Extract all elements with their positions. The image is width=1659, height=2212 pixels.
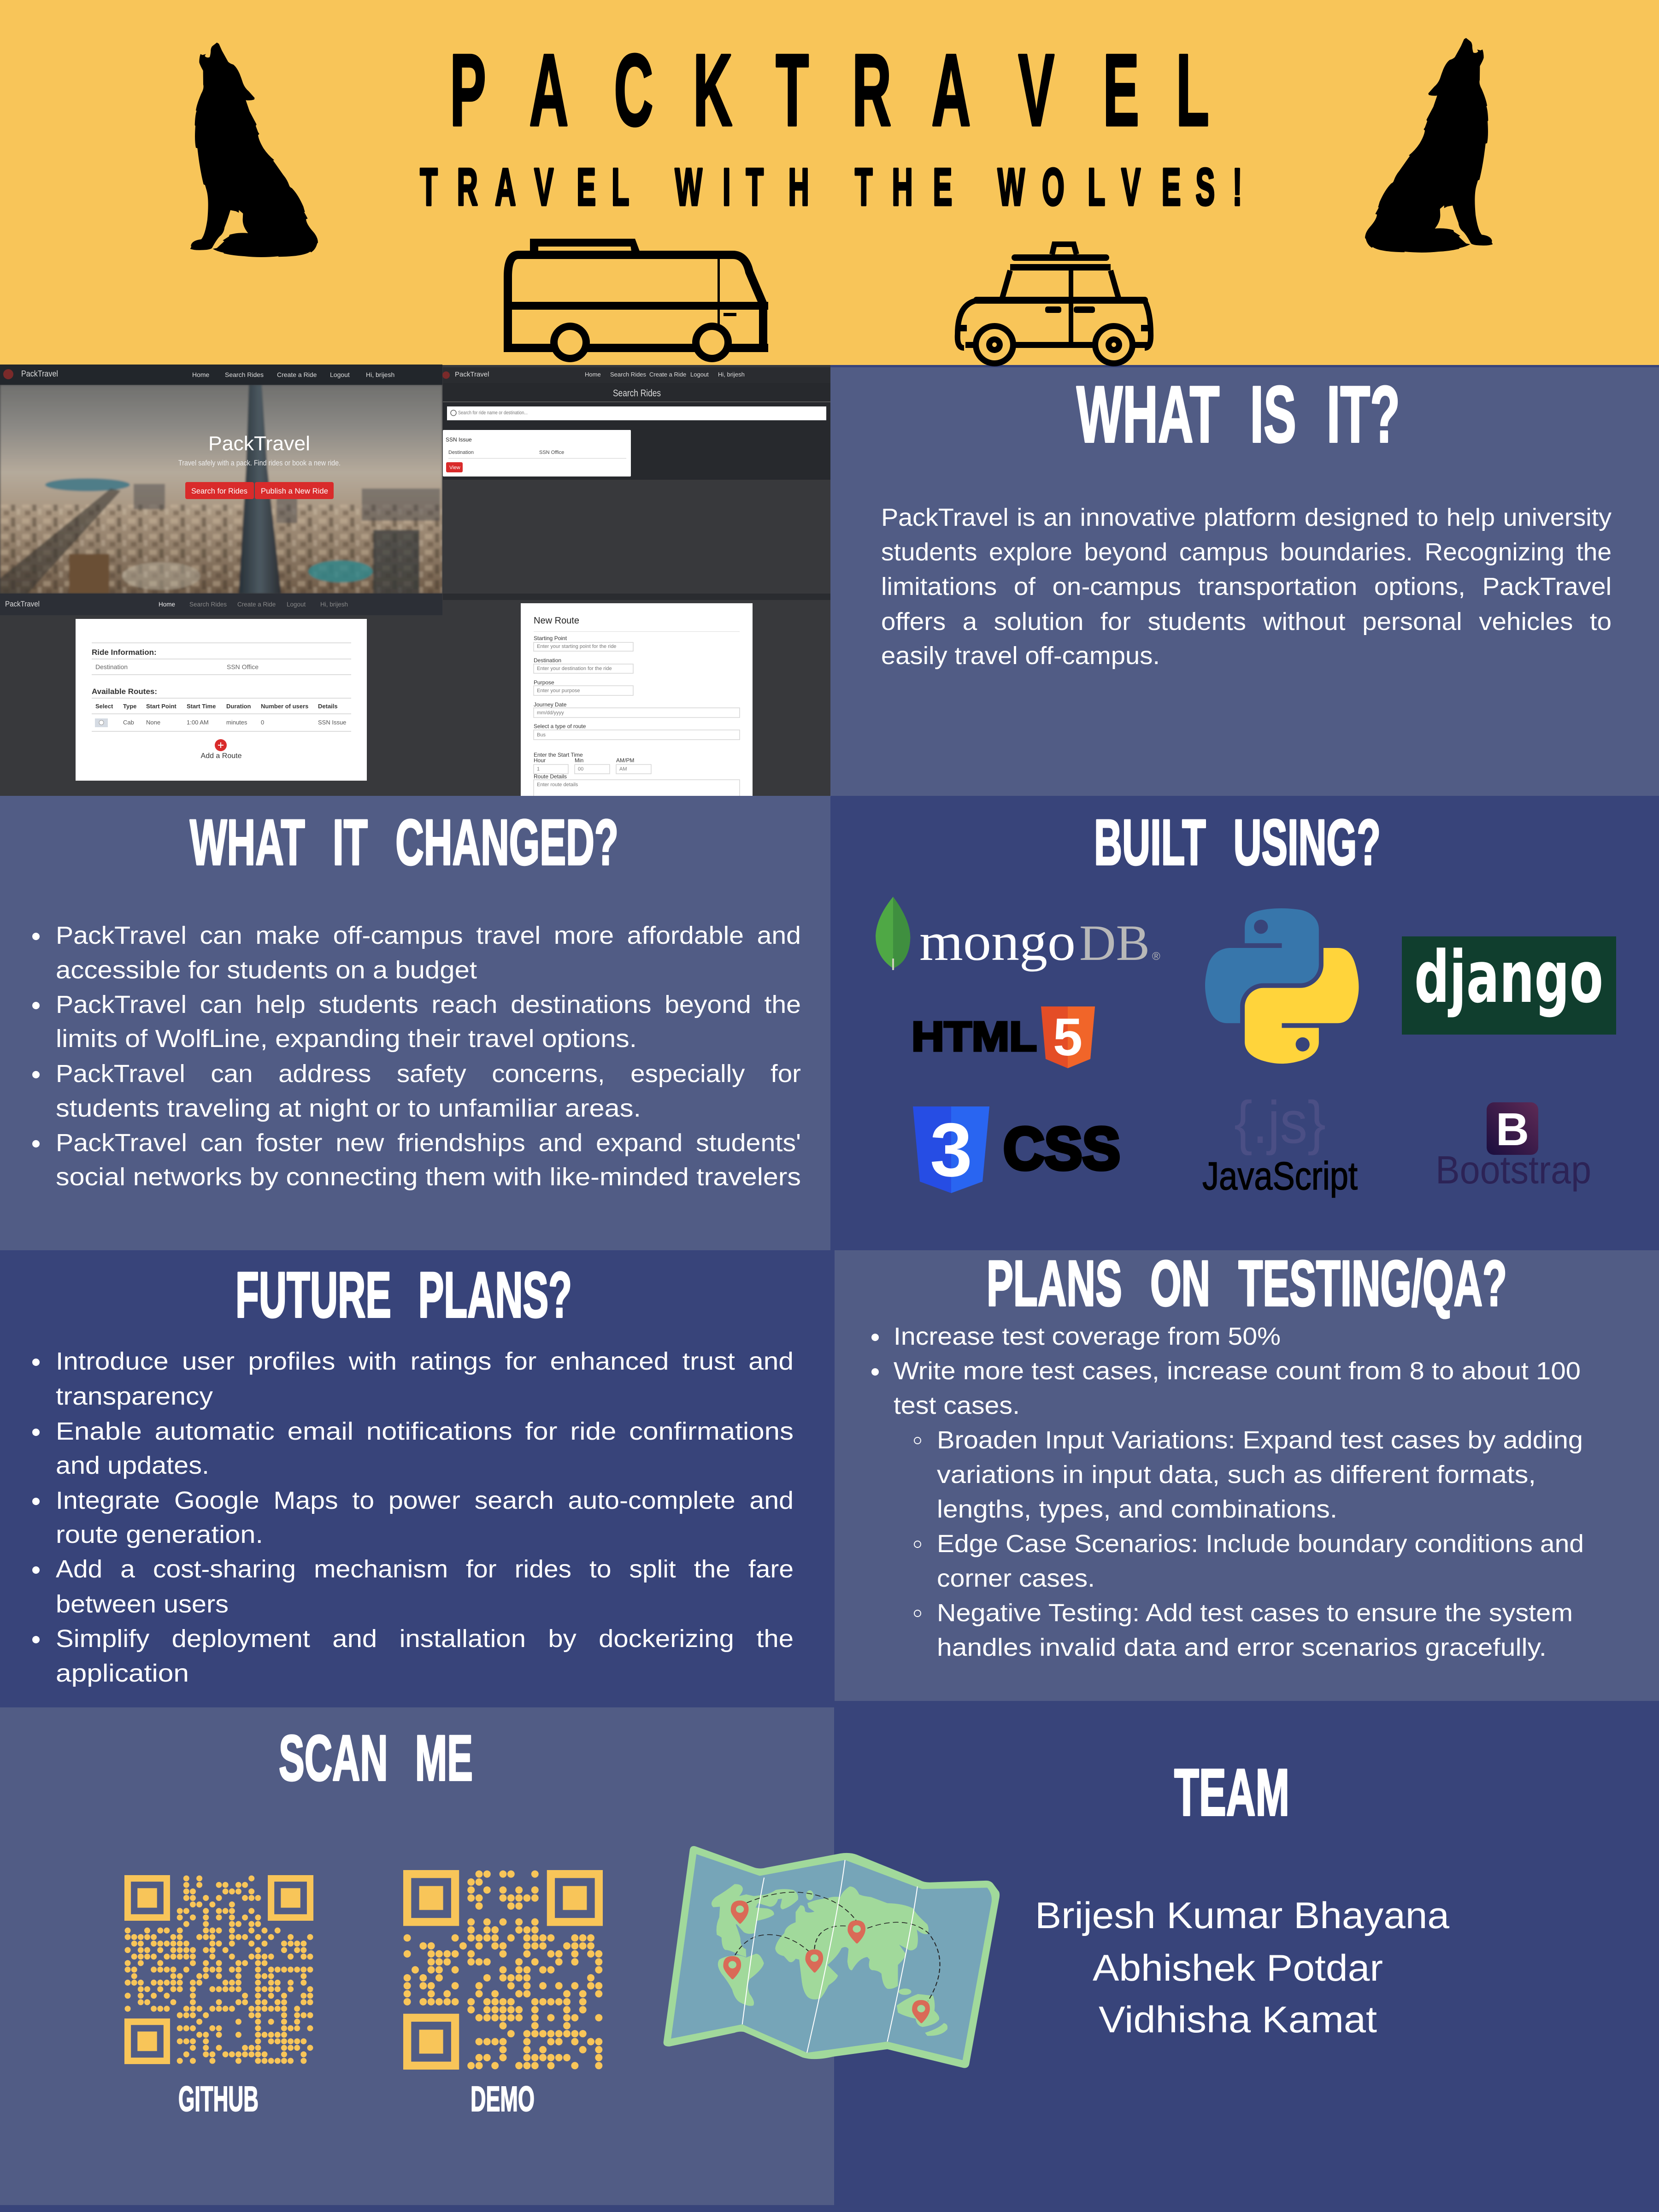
list: changes: PackTravel can help students reach destinations beyond the (56, 991, 801, 1018)
list: testing plans: handles invalid data and error scenarios gracefully. (937, 1634, 1547, 1661)
screenshot: new route form: Hour (534, 757, 546, 764)
logo: javascript (1202, 1088, 1358, 1198)
logo: css3 (913, 1106, 1120, 1193)
screenshot: home page: PackTravel (208, 432, 310, 455)
screenshot: new route form: 00 (578, 766, 583, 772)
screenshot: ride details: Hi, brijesh (320, 601, 348, 608)
screenshot: search rides: SSN Office (539, 450, 564, 455)
screenshot: new route form: Route Details (534, 773, 567, 780)
icon: howling wolf left (190, 42, 318, 257)
panel: plans on testing (835, 1247, 1659, 1701)
list: testing plans: Broaden Input Variations: Expand test cases by adding (937, 1426, 1583, 1454)
screenshot: ride details: 1:00 AM (187, 719, 209, 726)
screenshot: new route form: Bus (537, 732, 546, 738)
logo: css3: CSS (1003, 1115, 1120, 1182)
heading: what it changed: WHAT IT CHANGED? (190, 806, 618, 878)
screenshot: ride details: Select (95, 703, 113, 710)
panel: app screenshots (0, 365, 830, 798)
screenshot: search rides: View (449, 465, 460, 471)
team names: Brijesh Kumar Bhayana (1035, 1895, 1450, 1936)
screenshot: search rides: Search for ride name or destination... (458, 410, 528, 416)
screenshot: new route form: Enter the Start Time (534, 752, 583, 758)
list: changes: PackTravel can make off-campus travel more affordable and (56, 922, 801, 949)
logo: django (1402, 935, 1616, 1035)
list: changes: accessible for students on a budget (56, 956, 477, 984)
screenshot: ride details: Create a Ride (237, 601, 276, 608)
icon: taxi cab (958, 244, 1151, 366)
icon: folded world map (664, 1846, 1000, 2068)
screenshot: new route form: Min (575, 757, 583, 764)
screenshot: search rides: Search Rides (613, 388, 661, 399)
logo: bootstrap: Bootstrap (1435, 1148, 1591, 1192)
text block: description: easily travel off-campus. (881, 642, 1160, 670)
screenshot: ride details: Home (159, 601, 175, 608)
screenshot: new route form: AM/PM (616, 757, 634, 764)
icon: bus (504, 239, 768, 362)
screenshot: new route form: AM (619, 766, 627, 772)
logo: mongoDB: ® (1152, 950, 1160, 963)
panel: future plans (0, 1250, 834, 1707)
list: testing plans: Negative Testing: Add test cases to ensure the system (937, 1599, 1573, 1627)
screenshot: ride details: Type (123, 703, 136, 710)
logo: css3: 3 (930, 1107, 972, 1192)
screenshot: ride details: Duration (226, 703, 251, 710)
screenshot: home page: Search Rides (225, 371, 264, 378)
logo: html5: HTML (912, 1014, 1037, 1060)
list: testing plans: variations in input data, such as different formats, (937, 1461, 1536, 1488)
qr code: demo (407, 1874, 599, 2065)
screenshot: new route form: Purpose (534, 679, 554, 686)
screenshot: home page: Logout (330, 371, 350, 378)
text block: description: PackTravel is an innovative platform designed to help university (881, 504, 1612, 531)
panel: what it changed (0, 796, 830, 1250)
logo: javascript: {.js} (1234, 1088, 1326, 1156)
list: future plans: application (56, 1659, 189, 1687)
logo: javascript: JavaScript (1202, 1154, 1358, 1198)
photo: city skyline (0, 385, 442, 594)
screenshot: ride details: Logout (287, 601, 306, 608)
screenshot: new route form: Journey Date (534, 701, 567, 708)
screenshot: new route form: Enter route details (537, 782, 578, 788)
screenshot: ride details: Available Routes: (92, 687, 157, 696)
screenshot: new route form: mm/dd/yyyy (537, 710, 564, 716)
logo: mongoDB (876, 897, 1160, 972)
icon: howling wolf right (1365, 38, 1493, 253)
list: changes: PackTravel can address safety concerns, especially for (56, 1060, 801, 1088)
logo: html5: 5 (1053, 1008, 1082, 1067)
text block: description: students explore beyond campus boundaries. Recognizing the (881, 538, 1612, 566)
screenshot: search rides: PackTravel (455, 371, 489, 378)
screenshot: search rides: Create a Ride (649, 371, 686, 378)
list: future plans: Integrate Google Maps to power search auto-complete and (56, 1487, 794, 1514)
screenshot: ride details: Destination (95, 663, 128, 671)
heading: what is it: WHAT IS IT? (1077, 369, 1400, 459)
list: future plans: Enable automatic email notifications for ride confirmations (56, 1418, 794, 1445)
screenshot: ride details: Search Rides (189, 601, 227, 608)
screenshot: home page: Travel safely with a pack. Find rides or book a new ride. (178, 459, 341, 467)
screenshot: search rides: Home (585, 371, 601, 378)
screenshot: ride details: Number of users (261, 703, 308, 710)
screenshot: home page: Search for Rides (191, 487, 247, 495)
list: changes (32, 922, 801, 1191)
list: testing plans: corner cases. (937, 1565, 1095, 1592)
logo: mongoDB: mongo (919, 912, 1076, 972)
list: changes: PackTravel can foster new friendships and expand students' (56, 1129, 801, 1157)
list: future plans: between users (56, 1590, 229, 1618)
screenshot: home page: Home (192, 371, 210, 378)
heading: built using: BUILT USING? (1094, 806, 1381, 878)
title: PACKTRAVEL (450, 33, 1209, 147)
text block: description: offers a solution for students without personal vehicles to (881, 608, 1612, 635)
screenshot: new route form: Select a type of route (534, 723, 586, 729)
screenshot: home page: Publish a New Ride (261, 487, 328, 495)
screenshot: ride details: Start Point (146, 703, 176, 710)
label: github: GITHUB (178, 2079, 259, 2119)
label: demo: DEMO (471, 2079, 535, 2119)
list: changes: social networks by connecting them with like-minded travelers (56, 1163, 801, 1191)
screenshot: ride details: Start Time (187, 703, 216, 710)
text block: description: limitations of on-campus transportation options, PackTravel (881, 573, 1612, 600)
list: future plans: Introduce user profiles with ratings for enhanced trust and (56, 1347, 794, 1375)
logo: html5 (912, 1006, 1095, 1068)
screenshot: new route form: Enter your purpose (537, 688, 580, 694)
screenshot: ride details: minutes (226, 719, 247, 726)
logo: bootstrap (1435, 1102, 1591, 1192)
logo: bootstrap: B (1496, 1104, 1529, 1155)
screenshot: ride details: None (146, 719, 160, 726)
screenshot: search rides (442, 367, 830, 480)
screenshot: ride details: Details (318, 703, 338, 710)
screenshot: home page: Hi, brijesh (366, 371, 394, 378)
screenshot: search rides: SSN Issue (446, 436, 472, 443)
screenshot: search rides: Hi, brijesh (718, 371, 745, 378)
list: future plans: Simplify deployment and installation by dockerizing the (56, 1625, 794, 1653)
list: future plans: Add a cost-sharing mechanism for rides to split the fare (56, 1555, 794, 1583)
list: testing plans: Edge Case Scenarios: Include boundary conditions and (937, 1530, 1584, 1558)
panel: team (834, 1701, 1659, 2212)
heading: scan me: SCAN ME (279, 1722, 473, 1794)
screenshot: new route form: 1 (537, 766, 540, 772)
tagline: TRAVEL WITH THE WOLVES! (420, 158, 1242, 217)
list: future plans: route generation. (56, 1521, 263, 1548)
qr code: github (128, 1878, 310, 2061)
screenshot: search rides: Search Rides (610, 371, 647, 378)
panel: scan me (0, 1707, 834, 2205)
screenshot: search rides: Destination (448, 450, 474, 455)
screenshot: new route form: Enter your destination for the ride (537, 666, 612, 671)
screenshot: search rides: Logout (690, 371, 709, 378)
screenshot: ride details (0, 594, 442, 781)
list: changes: limits of WolfLine, expanding their travel options. (56, 1025, 637, 1053)
screenshot: ride details: SSN Issue (318, 719, 346, 726)
screenshot: ride details: 0 (261, 719, 264, 726)
list: future plans: and updates. (56, 1452, 209, 1479)
screenshot: new route form: Destination (534, 657, 561, 664)
list: testing plans (871, 1323, 1584, 1661)
team names: Abhishek Potdar (1093, 1947, 1383, 1989)
list: changes: students traveling at night or to unfamiliar areas. (56, 1094, 641, 1122)
list: testing plans: test cases. (894, 1392, 1020, 1419)
screenshot: new route form (443, 594, 830, 798)
screenshot: home page (0, 365, 442, 594)
heading: future plans: FUTURE PLANS? (235, 1259, 572, 1331)
logo: mongoDB: DB (1079, 915, 1150, 971)
list: testing plans: Increase test coverage from 50% (894, 1323, 1281, 1350)
text block: description (881, 504, 1612, 670)
panel: what is it (830, 367, 1659, 796)
screenshot: new route form: New Route (534, 616, 579, 626)
logo: python (1205, 908, 1359, 1064)
panel: built using (831, 796, 1659, 1250)
screenshot: new route form: Enter your starting point for the ride (537, 644, 616, 649)
heading: team: TEAM (1174, 1755, 1289, 1830)
team names: Vidhisha Kamat (1099, 1999, 1377, 2041)
screenshot: ride details: Ride Information: (92, 648, 157, 657)
list: future plans: transparency (56, 1382, 213, 1410)
screenshot: home page: Create a Ride (277, 371, 317, 378)
list: testing plans: lengths, types, and combinations. (937, 1495, 1337, 1523)
screenshot: home page: PackTravel (21, 369, 58, 378)
list: future plans (32, 1347, 794, 1687)
screenshot: ride details: SSN Office (227, 663, 259, 671)
screenshot: new route form: Starting Point (534, 635, 567, 641)
header band (0, 0, 1659, 366)
team names (1035, 1895, 1450, 2041)
screenshot: ride details: Add a Route (201, 752, 242, 760)
screenshot: ride details: Cab (123, 719, 134, 726)
screenshot: ride details: PackTravel (5, 600, 40, 608)
list: testing plans: Write more test cases, increase count from 8 to about 100 (894, 1357, 1581, 1385)
